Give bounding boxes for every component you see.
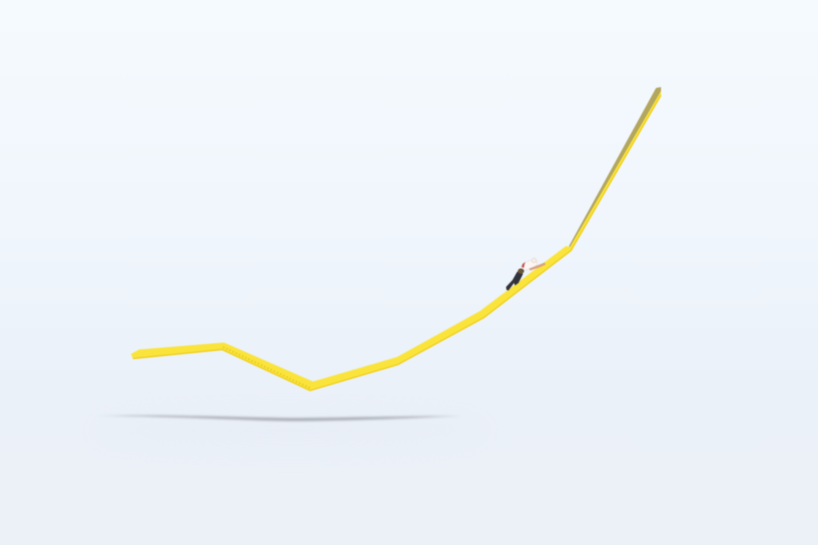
line body — [131, 91, 661, 391]
head — [532, 258, 536, 263]
yellow line chart — [131, 87, 661, 391]
climbing figure — [506, 258, 546, 290]
ridged side of the descending segment — [223, 347, 311, 388]
darker lower edge — [133, 95, 661, 390]
dark olive back face of the steep segment — [569, 87, 661, 250]
legs — [506, 270, 523, 290]
hips — [518, 268, 524, 274]
arm — [529, 262, 546, 270]
soft floor shadow glow — [90, 414, 490, 446]
red straps — [522, 262, 526, 268]
floor shadow of the line — [97, 415, 462, 421]
torso — [521, 260, 537, 270]
